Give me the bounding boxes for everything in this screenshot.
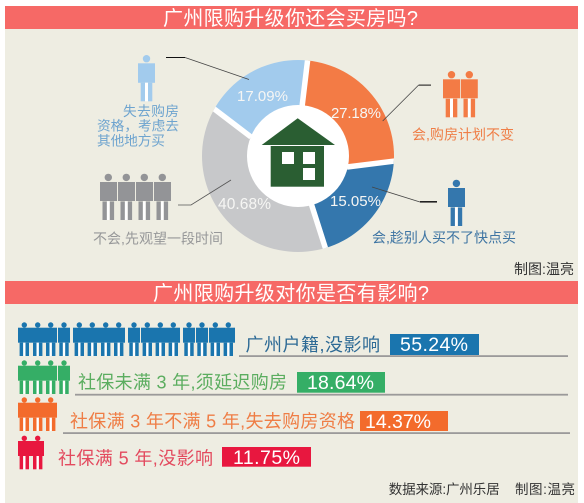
pictogram: green people [18, 360, 70, 394]
icon: four grey people [100, 174, 171, 220]
value badge: 55.24% [400, 334, 468, 356]
donut chart: 17.09% [237, 88, 288, 105]
value badge: 11.75% [233, 447, 300, 469]
label: lose eligibility [97, 104, 179, 148]
label: 社保未满 3 年,须延迟购房 [78, 372, 287, 392]
icon: house [262, 118, 335, 187]
pictogram: orange people [18, 397, 57, 431]
title: first question [5, 6, 578, 30]
icon: two orange people [443, 71, 478, 117]
row: over 5 years [18, 436, 311, 469]
icon: light blue person [138, 55, 155, 101]
label: wait and see: 不会,先观望一段时间 [93, 230, 223, 246]
credits: data source and graphic: 制图:温亮 [515, 481, 575, 497]
credits: data source and graphic: 数据来源:广州乐居 [389, 482, 500, 497]
row: Guangzhou hukou [18, 322, 568, 357]
leader line: dark blue [372, 187, 437, 203]
leader line: orange [383, 85, 431, 121]
donut chart: 27.18% [331, 105, 381, 122]
leader line: grey [178, 180, 231, 205]
credit: first chart: 制图:温亮 [514, 261, 574, 277]
label: lose eligibility: 资格，考虑去 [97, 118, 179, 134]
label: buy quickly: 会,趁别人买不了快点买 [372, 230, 516, 246]
donut chart: 40.68% [218, 196, 271, 213]
value badge: 14.37% [365, 411, 431, 433]
title: second question: 广州限购升级对你是否有影响? [153, 282, 429, 305]
label: 社保满 5 年,没影响 [58, 448, 213, 468]
underline [239, 355, 568, 357]
label: 广州户籍,没影响 [246, 335, 380, 355]
underline [75, 394, 568, 396]
row: under 3 years [18, 360, 568, 396]
label: plan unchanged: 会,购房计划不变 [412, 126, 514, 142]
label: lose eligibility: 其他地方买 [97, 134, 165, 148]
pictogram: red people [18, 436, 44, 469]
leader line: light blue [166, 57, 249, 80]
label: 社保满 3 年不满 5 年,失去购房资格 [70, 412, 355, 432]
underline [63, 432, 570, 434]
credits: data source and graphic [389, 481, 575, 497]
icon: dark blue person [448, 180, 465, 226]
row: 3 to 5 years [18, 397, 570, 434]
donut chart [202, 60, 394, 252]
pictogram: blue people [18, 322, 235, 356]
title: first question: 广州限购升级你还会买房吗? [163, 7, 418, 30]
title: second question [5, 281, 578, 305]
donut chart: 15.05% [330, 193, 381, 210]
label: lose eligibility: 失去购房 [123, 104, 179, 119]
value badge: 18.64% [307, 372, 374, 394]
